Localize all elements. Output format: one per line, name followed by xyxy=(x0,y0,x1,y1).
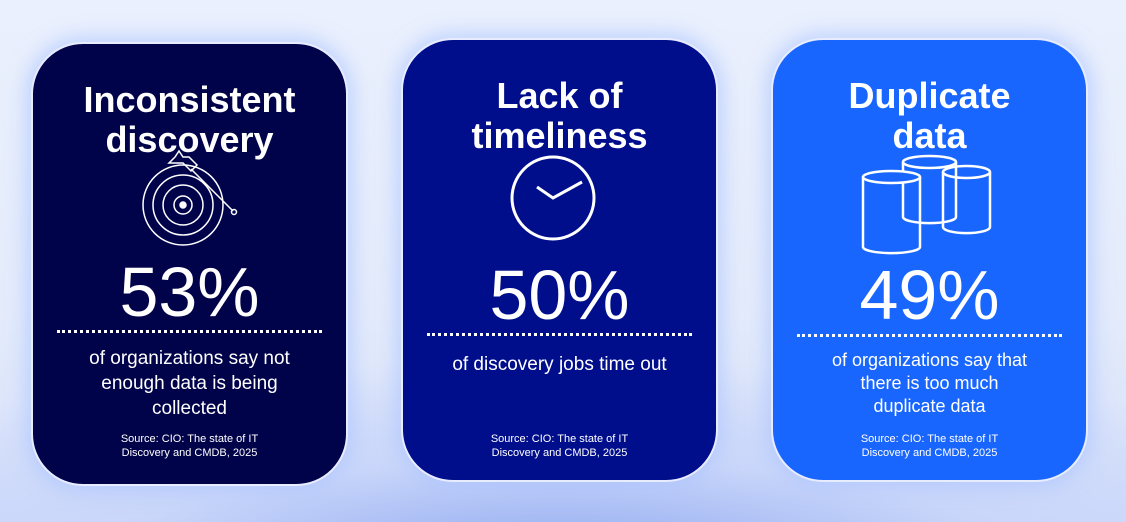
title: Lack of xyxy=(496,75,623,116)
percentage: 53% xyxy=(119,253,260,331)
icon: clock xyxy=(510,156,596,240)
card: lack of timeliness xyxy=(401,38,718,482)
card: duplicate data xyxy=(771,38,1088,482)
source xyxy=(861,433,998,459)
description: of organizations say not enough data is being collected xyxy=(89,348,290,419)
title: data xyxy=(892,115,967,156)
card: inconsistent discovery xyxy=(31,42,348,486)
percentage: 50% xyxy=(489,256,630,334)
source xyxy=(491,433,628,459)
description: of organizations say that there is too much duplicate data xyxy=(832,350,1027,416)
source: Discovery and CMDB, 2025 xyxy=(492,447,627,459)
title xyxy=(471,75,648,156)
source: Source: CIO: The state of IT xyxy=(861,433,998,445)
title xyxy=(848,75,1011,156)
title: discovery xyxy=(105,119,274,160)
source xyxy=(121,433,258,459)
source: Source: CIO: The state of IT xyxy=(491,433,628,445)
icon: target with arrow xyxy=(142,150,238,246)
description: of discovery jobs time out xyxy=(452,354,667,375)
title xyxy=(83,79,296,160)
percentage: 49% xyxy=(859,256,1000,334)
title: timeliness xyxy=(471,115,648,156)
source: Discovery and CMDB, 2025 xyxy=(862,447,997,459)
icon: database cylinders xyxy=(862,154,992,254)
source: Source: CIO: The state of IT xyxy=(121,433,258,445)
title: Inconsistent xyxy=(83,79,296,120)
title: Duplicate xyxy=(848,75,1011,116)
source: Discovery and CMDB, 2025 xyxy=(122,447,257,459)
